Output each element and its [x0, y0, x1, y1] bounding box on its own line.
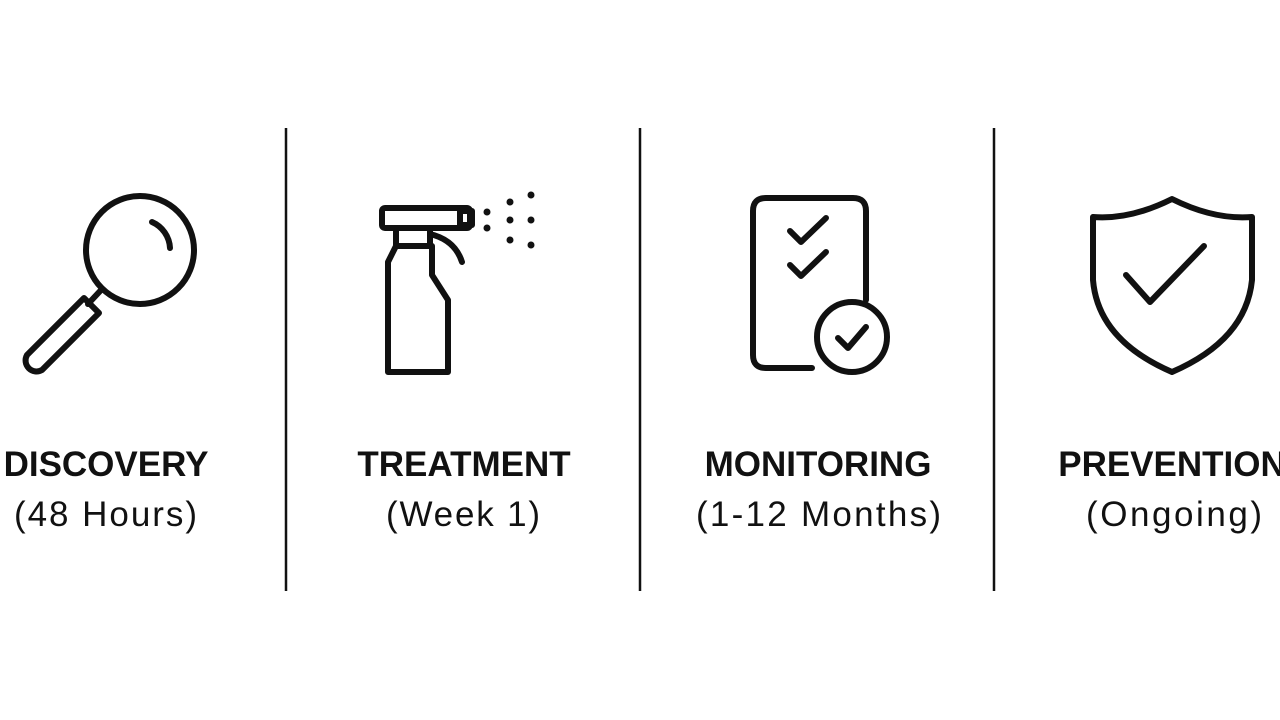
icon: spray bottle — [382, 192, 534, 372]
heading: discovery: DISCOVERY — [4, 445, 208, 484]
panel: treatment — [357, 192, 571, 534]
heading: monitoring: MONITORING — [705, 445, 931, 484]
icon: checklist — [753, 198, 887, 372]
panel: discovery — [4, 196, 208, 534]
text: 48 hours: (48 Hours) — [14, 495, 197, 534]
heading: treatment: TREATMENT — [357, 445, 571, 484]
heading: prevention: PREVENTION — [1058, 445, 1280, 484]
panel: monitoring — [696, 198, 941, 534]
icon: shield — [1093, 199, 1252, 372]
text: ongoing: (Ongoing) — [1086, 495, 1262, 534]
icon: magnifying glass — [26, 196, 194, 371]
text: 1-12 months: (1-12 Months) — [696, 495, 941, 534]
text: week 1: (Week 1) — [386, 495, 540, 534]
panel: prevention — [1058, 199, 1280, 534]
